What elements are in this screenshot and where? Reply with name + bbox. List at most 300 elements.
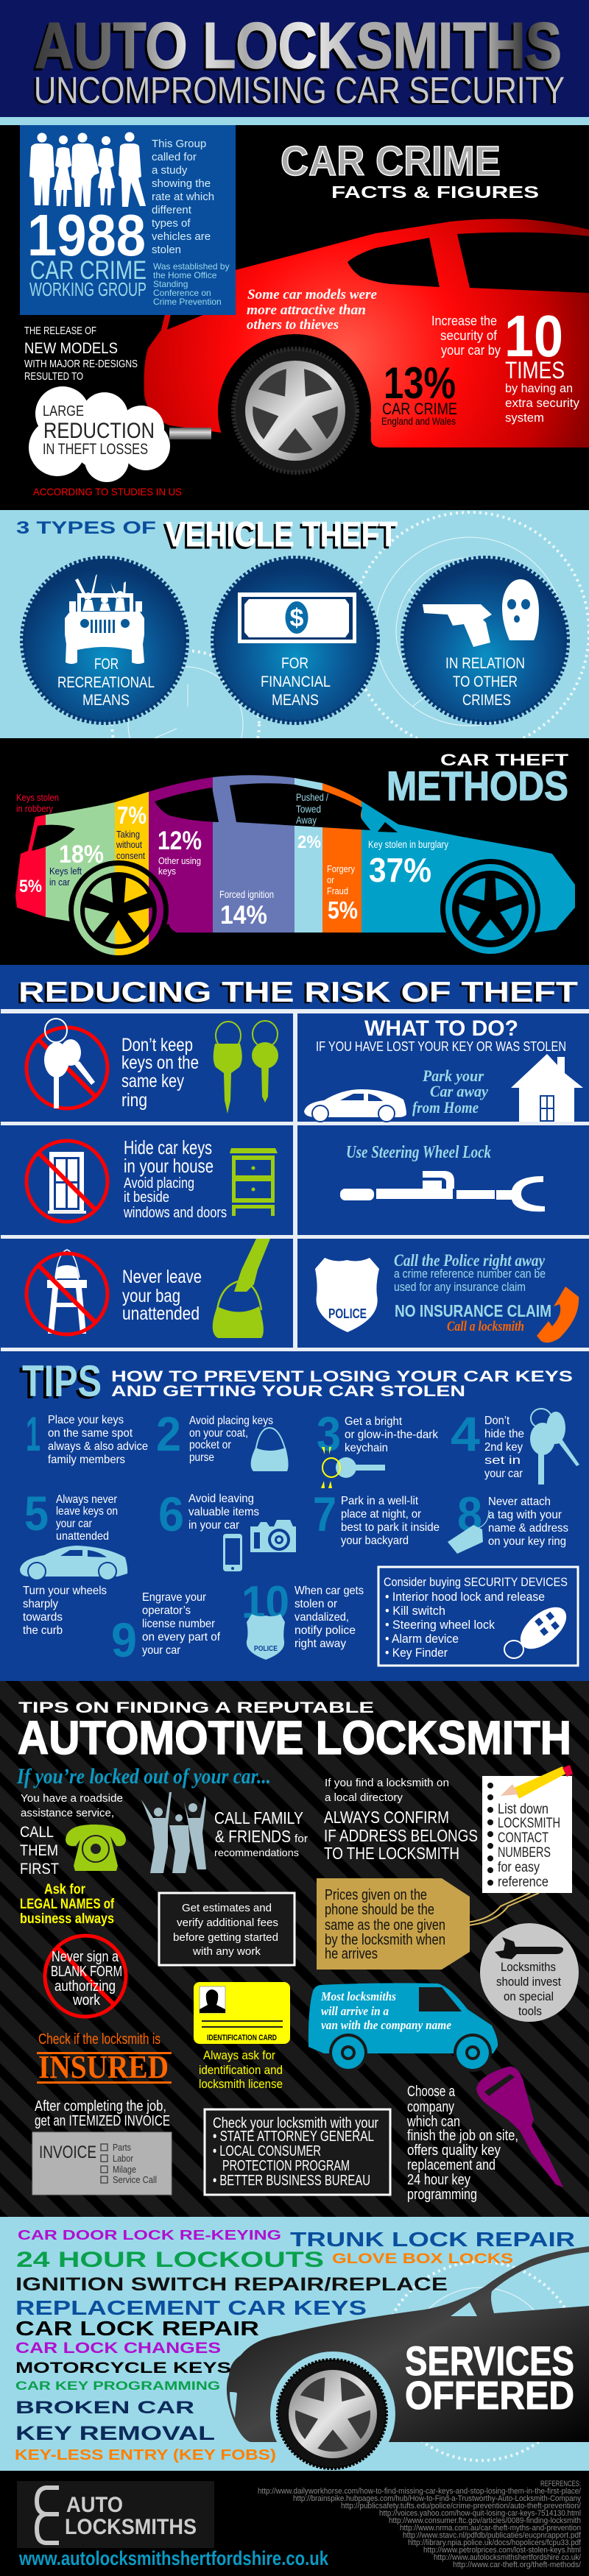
- tip: roadside assistance: You have a roadside: [21, 1792, 123, 1805]
- panel: three types background: [0, 510, 589, 738]
- text: stolen or: [294, 1598, 338, 1610]
- subheading: tips: [111, 1368, 573, 1400]
- text: wheels: [23, 1585, 107, 1637]
- icon: people silhouettes: [29, 132, 146, 207]
- icon: phone: [223, 1534, 242, 1571]
- icon: badge: POLICE: [254, 1645, 278, 1653]
- icon: no door: [27, 1141, 107, 1222]
- tip 8: on your key ring: [488, 1535, 566, 1548]
- heading: car crime: CAR CRIME: [281, 138, 501, 185]
- panel: security devices: • Alarm device: [385, 1632, 459, 1646]
- list: services: BROKEN CAR: [15, 2398, 194, 2418]
- label: keys stolen in robbery: Keys stolen: [16, 792, 59, 803]
- tip 8: name & address: [488, 1522, 568, 1535]
- illustration: black car front: [227, 2246, 589, 2477]
- text: new models: [24, 325, 138, 383]
- tip: legal names: business always: [20, 1911, 114, 1927]
- text: ask for identification: Always ask for: [203, 2048, 275, 2062]
- icon: badge: [247, 1614, 285, 1660]
- tip 2: [156, 1406, 289, 1471]
- subheading: locked out: If you’re locked out of your car...: [16, 1764, 271, 1788]
- box: check locksmith: [205, 2109, 390, 2195]
- warning: blank form: work: [72, 1992, 101, 2009]
- text: itemized invoice: [35, 2098, 170, 2129]
- note: list locksmith numbers: reference: [498, 1875, 549, 1890]
- text: park away: Park your: [422, 1066, 484, 1085]
- invoice form: [32, 2132, 172, 2195]
- tip 6: valuable items: [188, 1506, 259, 1518]
- icon: hand holding bag: [213, 1239, 270, 1338]
- tip: bag: [27, 1239, 270, 1338]
- panel: call police: [315, 1251, 579, 1342]
- subheading: facts and figures: FACTS & FIGURES: [331, 183, 539, 202]
- icon: balaclava mask: [502, 579, 539, 640]
- text: study description: vehicles are: [152, 230, 211, 243]
- text: wheels: Turn your wheels: [23, 1585, 107, 1597]
- callout cloud: large reduction: LARGE: [43, 403, 84, 420]
- stat: 2% pushed: 2%: [297, 832, 321, 852]
- box: check locksmith: • STATE ATTORNEY GENERAL: [213, 2129, 374, 2145]
- stat: 13% car crime: England and Wales: [381, 415, 456, 427]
- icon: key fob: [504, 1599, 574, 1658]
- text: choose a company: Choose a: [407, 2084, 456, 2100]
- note: list locksmith numbers: for easy: [498, 1860, 540, 1875]
- string connecting tag and note: [448, 1893, 539, 1926]
- tip 7: [313, 1487, 440, 1547]
- label: IN RELATION: [445, 655, 525, 672]
- van: will arrive in a: [321, 2004, 389, 2018]
- text: [123, 1136, 227, 1221]
- text: choose a company: company: [407, 2099, 454, 2115]
- panel: car crime background: [0, 125, 589, 510]
- tip: family and friends: for: [294, 1833, 308, 1845]
- id card: IDENTIFICATION CARD: [207, 2034, 277, 2042]
- list: services: IGNITION SWITCH REPAIR/REPLACE: [15, 2274, 448, 2295]
- box: check locksmith: • BETTER BUSINESS BUREAU: [213, 2173, 370, 2189]
- stat: 5% forgery: [327, 863, 358, 924]
- icon: pencil: [501, 1765, 573, 1800]
- text: [121, 1035, 199, 1111]
- source note: ACCORDING TO STUDIES IN US: [33, 486, 182, 498]
- callout: call a locksmith: Call a locksmith: [447, 1319, 524, 1334]
- icon: banknote: [238, 592, 356, 643]
- stat: 10 times security: Increase the: [431, 314, 497, 328]
- tip 4: 4: [451, 1406, 480, 1461]
- callout cloud: large reduction: IN THEFT LOSSES: [43, 441, 148, 458]
- stat: 10 times security: [431, 303, 579, 425]
- panel: security devices: • Key Finder: [385, 1646, 448, 1660]
- panel: steering wheel lock: Use Steering Wheel Lock: [346, 1143, 491, 1162]
- text: same key: [121, 1071, 184, 1091]
- callout: attractive models: others to thieves: [247, 317, 339, 333]
- icon: car: [20, 1546, 127, 1580]
- panel: security devices: [378, 1567, 578, 1666]
- icon: purse: [251, 1428, 289, 1471]
- icon: white car: [304, 1089, 406, 1122]
- icon: jeep with people: [65, 574, 144, 664]
- tip 7: best to park it inside: [341, 1521, 440, 1534]
- icon: purple key: [476, 2067, 563, 2187]
- tip: legal names: Ask for: [44, 1882, 86, 1897]
- tip 5: 5: [24, 1486, 49, 1540]
- tip 5: unattended: [56, 1530, 109, 1543]
- label: [261, 655, 331, 709]
- icon: green telephone: [66, 1825, 126, 1871]
- text: established by: [153, 261, 230, 307]
- stat: 2% pushed: Away: [296, 815, 317, 826]
- box: check locksmith: • LOCAL CONSUMER: [213, 2143, 321, 2159]
- heading: car crime working group: WORKING GROUP: [29, 278, 147, 300]
- stat: 18% keys left: Keys left: [49, 866, 82, 877]
- stat: 12% other keys: Other using: [158, 855, 201, 866]
- tag: prices: same as the one given: [325, 1917, 445, 1933]
- text: choose a company: replacement and: [407, 2157, 495, 2173]
- box: check locksmith: Check your locksmith with your: [213, 2115, 378, 2131]
- chart: segmented car: [15, 773, 579, 960]
- text: choose a company: which can: [406, 2114, 460, 2130]
- text: study description: different: [152, 204, 192, 216]
- text: NO INSURANCE CLAIM: [395, 1301, 551, 1320]
- callout: attractive models: Some car models were: [247, 287, 378, 302]
- icon: banknote: $: [290, 604, 304, 632]
- icon: steering lock: [340, 1171, 545, 1211]
- tip 8: a tag with your: [488, 1509, 562, 1521]
- tip: confirm address: [324, 1777, 478, 1863]
- text: study description: called for: [152, 151, 197, 163]
- icon: camera: [250, 1520, 296, 1552]
- light blue strip: [0, 117, 589, 125]
- text: Don’t keep: [121, 1035, 193, 1055]
- tip 9: Engrave your: [142, 1591, 207, 1604]
- icon: green keys: [214, 1021, 278, 1114]
- tag: prices: he arrives: [325, 1946, 378, 1962]
- text: choose a company: programming: [407, 2187, 477, 2203]
- text: ask for identification: identification and: [199, 2063, 283, 2077]
- tip 4: hide the: [484, 1428, 524, 1440]
- box: estimates: before getting started: [173, 1931, 278, 1944]
- stat: 7% taking: without: [116, 840, 142, 850]
- tip: roadside assistance: THEM: [20, 1842, 58, 1859]
- text: established by: Conference on: [153, 288, 211, 298]
- text: Avoid placing: [124, 1175, 194, 1192]
- stat: 10 times security: your car by: [441, 343, 501, 358]
- tip 5: [20, 1486, 127, 1637]
- text: study description: showing the: [152, 177, 211, 190]
- tip 5: your car: [56, 1518, 93, 1530]
- tip: confirm address: If you find a locksmith on: [325, 1777, 449, 1789]
- list: services: [15, 2228, 575, 2463]
- invoice form: Labor: [113, 2153, 134, 2164]
- stat: 7% taking: [116, 802, 147, 861]
- tag: prices: by the locksmith when: [325, 1932, 445, 1948]
- text: it beside: [124, 1189, 169, 1206]
- footer background: [0, 2471, 589, 2576]
- text: study description: [152, 138, 214, 256]
- tip: roadside assistance: FIRST: [20, 1861, 59, 1878]
- stat: 10 times security: TIMES: [505, 357, 565, 383]
- note: list locksmith numbers: LOCKSMITH: [498, 1816, 560, 1831]
- tip: family and friends: recommendations: [214, 1847, 299, 1858]
- text: wheels: the curb: [23, 1624, 63, 1637]
- stat: 7% taking: consent: [116, 851, 145, 861]
- tip 7: place at night, or: [341, 1508, 422, 1521]
- icon: no bag on stool: [27, 1250, 107, 1334]
- text: Hide car keys: [124, 1136, 212, 1158]
- panel: what to do: [304, 1016, 583, 1122]
- heading: car theft: CAR THEFT: [440, 751, 569, 769]
- text: study description: a study: [152, 164, 188, 177]
- label: keys stolen in robbery: [16, 792, 59, 814]
- stat: 5% forgery: Fraud: [327, 885, 348, 896]
- list: services: KEY REMOVAL: [15, 2422, 215, 2444]
- text: choose a company: 24 hour key: [407, 2172, 470, 2188]
- text: itemized invoice: After completing the job,: [35, 2098, 166, 2115]
- panel: car theft methods background: [0, 738, 589, 965]
- box: estimates: Get estimates and: [182, 1902, 272, 1914]
- references: http://www.car-theft.org/theft-methods/: [453, 2561, 582, 2569]
- text: established by: the Home Office: [153, 270, 217, 280]
- list: services: MOTORCYCLE KEYS: [15, 2360, 231, 2377]
- icon: no keys: [27, 1019, 107, 1108]
- text: vandalized,: [294, 1611, 349, 1624]
- panel: security devices: • Kill switch: [385, 1604, 445, 1618]
- text: established by: Was established by: [153, 261, 230, 272]
- tip 2: purse: [189, 1451, 214, 1464]
- logo: AUTO: [66, 2493, 123, 2517]
- tip 1: always & also advice: [48, 1440, 148, 1453]
- stat: 12% other keys: [158, 827, 202, 877]
- icon: wrench: [495, 1937, 563, 1959]
- website url: www.autolocksmithshertfordshire.co.uk: [18, 2547, 329, 2569]
- stamp: insured: [37, 2031, 172, 2085]
- icon: orange phone: [537, 1287, 579, 1342]
- tip 2: on your coat,: [189, 1427, 248, 1440]
- stat: 5% forgery: Forgery: [327, 863, 355, 874]
- wheel: rear segmented: [74, 866, 163, 955]
- stat: 14% forced ignition: Forced ignition: [219, 889, 274, 900]
- tip 1: family members: [48, 1454, 125, 1466]
- icon: green dresser: [230, 1148, 278, 1216]
- text: park away: Car away: [430, 1082, 488, 1100]
- list: services: KEY-LESS ENTRY (KEY FOBS): [15, 2447, 276, 2463]
- warning: blank form: authorizing: [54, 1978, 116, 1995]
- label: RECREATIONAL: [57, 674, 155, 691]
- label: keys stolen in robbery: in robbery: [16, 803, 53, 814]
- tip 8: Never attach: [488, 1496, 551, 1508]
- icon: key pair: [530, 1409, 579, 1485]
- tip 10: 10: [241, 1577, 289, 1628]
- tip 4: your car: [484, 1468, 523, 1480]
- text: keys on the: [121, 1052, 199, 1073]
- list: services: GLOVE BOX LOCKS: [332, 2251, 513, 2267]
- invoice form: INVOICE: [39, 2142, 96, 2162]
- tip 3: Get a bright: [345, 1415, 403, 1428]
- text: new models: WITH MAJOR RE-DESIGNS: [24, 358, 138, 370]
- text: wheels: sharply: [23, 1598, 58, 1610]
- text: Never leave: [122, 1267, 202, 1287]
- stat: 5% forgery: 5%: [328, 896, 358, 924]
- invoice form: Milage: [113, 2164, 136, 2175]
- heading: methods: METHODS: [387, 762, 568, 809]
- tip 7: your backyard: [341, 1535, 409, 1547]
- stat: 5% forgery: or: [327, 874, 335, 885]
- text: ring: [121, 1090, 147, 1111]
- tip 1: 1: [26, 1406, 40, 1461]
- tip: roadside assistance: CALL: [20, 1824, 54, 1841]
- warning: blank form: Never sign a: [52, 1949, 119, 1965]
- stat: 10 times security: extra security: [505, 396, 579, 410]
- text: study description: stolen: [152, 244, 181, 256]
- text: new models: NEW MODELS: [24, 340, 118, 357]
- text: choose a company: finish the job on site,: [407, 2128, 518, 2144]
- text: choose a company: offers quality key: [407, 2142, 501, 2159]
- stat: 12% other keys: keys: [158, 866, 176, 877]
- tip 6: Avoid leaving: [188, 1493, 254, 1505]
- icon: police badge: POLICE: [328, 1306, 367, 1321]
- stat: 10 times security: security of: [440, 328, 498, 343]
- icon: house: [511, 1054, 583, 1122]
- stat: 13% car crime: 13%: [384, 358, 456, 408]
- tip 3: 3: [317, 1406, 341, 1461]
- wheel: front: [445, 864, 535, 954]
- tip 9: on every part of: [142, 1631, 221, 1643]
- tip 9: operator’s: [142, 1604, 191, 1617]
- tip 7: 7: [313, 1487, 336, 1541]
- box: check locksmith: PROTECTION PROGRAM: [222, 2158, 350, 2174]
- text: [394, 1251, 551, 1320]
- icon: pistol: [423, 604, 492, 647]
- note: list locksmith numbers: NUMBERS: [498, 1845, 551, 1861]
- warning: blank form: [45, 1936, 126, 2017]
- panel: automotive locksmith background: [0, 1681, 589, 2217]
- stat: 37% burglary: [368, 839, 448, 889]
- list: services: 24 HOUR LOCKOUTS: [16, 2248, 324, 2272]
- text: windows and doors: [123, 1205, 227, 1221]
- stat: 7% taking: Taking: [116, 829, 140, 840]
- van: van with the company name: [321, 2018, 451, 2032]
- tip 8: 8: [457, 1487, 482, 1541]
- panel: reducing risk and tips background: [0, 965, 589, 1681]
- label: CRIMES: [462, 692, 511, 709]
- box: estimates: verify additional fees: [177, 1917, 278, 1929]
- heading: services offered: [405, 2338, 574, 2418]
- tip: confirm address: ALWAYS CONFIRM: [324, 1808, 449, 1827]
- tip 4: set in: [484, 1454, 521, 1467]
- stat: 10 times security: system: [505, 411, 544, 425]
- label: [445, 655, 525, 709]
- label: FOR: [94, 656, 119, 673]
- tip: confirm address: a local directory: [325, 1791, 403, 1804]
- invoice form: Parts: [113, 2142, 131, 2153]
- note: list locksmith numbers: List down: [498, 1802, 549, 1817]
- tip: separate keys: [27, 1019, 278, 1114]
- panel: steering wheel lock: [340, 1143, 545, 1211]
- text: park away: from Home: [412, 1098, 479, 1117]
- tip 8: [448, 1487, 568, 1554]
- stat: 2% pushed: Towed: [296, 804, 321, 815]
- heading: reducing the risk of theft: REDUCING THE RISK OF THEFT: [18, 977, 578, 1008]
- heading: tips: TIPS: [22, 1356, 102, 1406]
- van: [308, 1983, 498, 2072]
- tip 3: keychain: [345, 1442, 388, 1454]
- stat: 18% keys left: 18%: [59, 841, 104, 868]
- stat: 10 times security: 10: [504, 303, 563, 369]
- panel: what to do: WHAT TO DO?: [364, 1016, 518, 1041]
- text: Call the Police right away: [394, 1251, 546, 1270]
- stat: 37% burglary: 37%: [369, 851, 431, 889]
- callout: special tools: should invest: [496, 1975, 561, 1989]
- tip 10: [241, 1577, 364, 1660]
- tip 4: [451, 1406, 579, 1485]
- panel: security devices: • Steering wheel lock: [385, 1618, 495, 1632]
- stamp: insured: INSURED: [38, 2049, 169, 2085]
- badge: other crimes: [403, 559, 567, 722]
- callout cloud: large reduction: REDUCTION: [43, 419, 155, 443]
- text: itemized invoice: get an ITEMIZED INVOICE: [35, 2113, 170, 2129]
- text: study description: rate at which: [152, 191, 214, 203]
- stat: 18% keys left: in car: [49, 877, 70, 888]
- callout: special tools: on special: [504, 1989, 554, 2003]
- tip 9: your car: [142, 1644, 181, 1657]
- text: in your house: [124, 1155, 214, 1177]
- callout: attractive models: more attractive than: [247, 302, 366, 318]
- callout cloud: large reduction: [29, 386, 170, 482]
- van: Most locksmiths: [320, 1989, 396, 2003]
- tip 6: 6: [158, 1487, 184, 1541]
- tip 4: 2nd key: [484, 1441, 523, 1454]
- tip 9: 9: [111, 1613, 137, 1667]
- callout: special tools: Locksmiths: [501, 1960, 556, 1974]
- illustration: red car: [144, 219, 589, 487]
- warning: blank form: BLANK FORM: [51, 1964, 122, 1980]
- list: services: CAR LOCK REPAIR: [15, 2317, 259, 2340]
- header band: [0, 0, 589, 117]
- heading: car crime working group: CAR CRIME: [30, 256, 147, 285]
- label: [57, 656, 155, 709]
- logo: LOCKSMITHS: [65, 2515, 197, 2539]
- tip 2: pocket or: [189, 1439, 232, 1451]
- stat: 18% keys left: [49, 841, 104, 888]
- text: study description: types of: [152, 217, 191, 230]
- list: services: CAR KEY PROGRAMMING: [15, 2379, 220, 2393]
- invoice form: Service Call: [113, 2174, 157, 2185]
- box: estimates: [159, 1893, 294, 1965]
- stat: 2% pushed: Pushed /: [296, 792, 328, 803]
- tip 2: 2: [156, 1406, 181, 1461]
- tip 3: or glow-in-the-dark: [345, 1429, 439, 1441]
- icon: key tag: [448, 1510, 489, 1554]
- stamp: insured: Check if the locksmith is: [38, 2031, 161, 2048]
- panel: 1988 working group: [20, 125, 236, 315]
- label: MEANS: [82, 692, 130, 709]
- tag: prices: Prices given on the: [325, 1887, 427, 1903]
- tip: family and friends: [214, 1808, 308, 1858]
- heading: tips on finding: TIPS ON FINDING A REPUTABLE: [18, 1699, 374, 1716]
- tip 3: [317, 1406, 439, 1488]
- icon: logo swoosh: [37, 2488, 59, 2543]
- stat: 37% burglary: Key stolen in burglary: [368, 839, 448, 850]
- tip 5: leave keys on: [56, 1505, 118, 1518]
- tag: prices: phone should be the: [325, 1902, 434, 1918]
- note: list locksmith numbers: CONTACT: [498, 1830, 549, 1846]
- tip 7: Park in a well-lit: [341, 1495, 419, 1507]
- tip 2: Avoid placing keys: [189, 1415, 273, 1427]
- list: services: REPLACEMENT CAR KEYS: [15, 2296, 367, 2319]
- heading: vehicle theft: VEHICLE THEFT: [166, 514, 398, 553]
- tip 9: [111, 1591, 221, 1667]
- tip: family and friends: & FRIENDS: [215, 1827, 291, 1846]
- tip 1: [26, 1406, 148, 1466]
